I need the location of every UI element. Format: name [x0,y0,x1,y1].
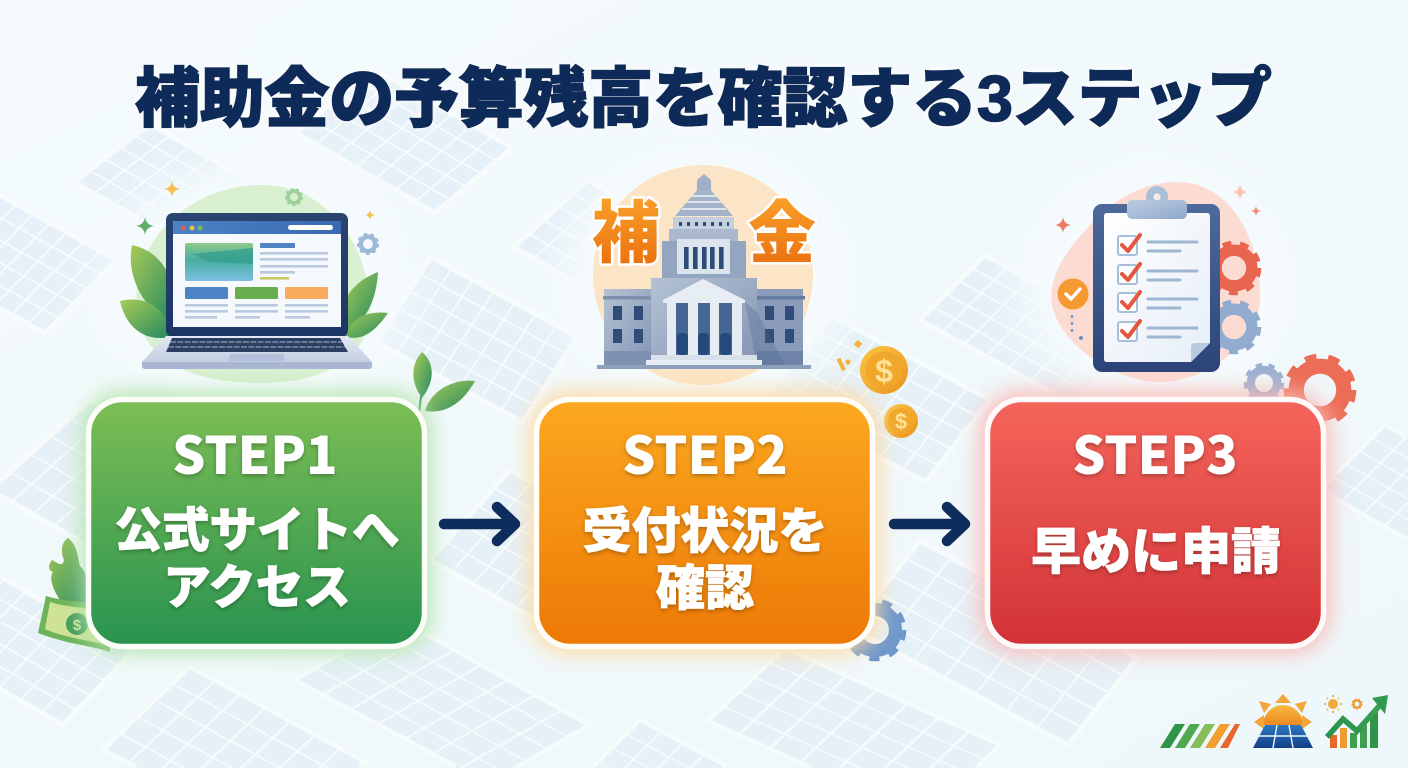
title: 補助金の予算残高を確認する3ステップ [135,62,1272,135]
logo [1160,694,1388,748]
white glow behind illustrations [105,150,1300,410]
browser bar [173,221,341,234]
leaves by step 1 card [413,352,475,414]
clipboard board [1093,204,1220,372]
banknote and leaf by step 1 [38,538,110,652]
orange check badge [1058,278,1088,340]
step 2 card [536,400,872,646]
kanji 金: 金 [748,196,816,272]
gears behind clipboard [1210,244,1258,292]
step 2 text: 受付状況を [582,505,828,559]
step 3 text: 早めに申請 [1031,524,1281,580]
step 1 card [88,400,424,646]
keyboard [166,338,348,352]
sparkles [1055,184,1261,233]
green blob [136,185,370,383]
sun and solar panel [1253,694,1313,748]
step 2 text: STEP2 [622,414,788,489]
sparkles and small gears [136,181,378,254]
step 3 illustration: clipboard [1051,182,1261,382]
touchpad [228,354,285,361]
banknote and leaf by step 1: $ [73,617,82,634]
kanji 補: 補 [592,196,660,272]
step 3 card [988,400,1324,646]
step 1 text: アクセス [163,562,351,615]
growth chart [1324,695,1388,748]
card glows [82,392,1330,653]
laptop lid [166,213,348,337]
step 1 text: STEP1 [172,414,338,489]
blue gear by step 2 [847,602,903,658]
step 2 illustration: Diet building [592,165,816,385]
arrow 2 to 3 [894,507,965,541]
arrow 1 to 2 [444,507,515,541]
step 3 text: STEP3 [1072,414,1238,489]
clip [1127,186,1187,219]
step 1 text: 公式サイトへ [114,505,400,558]
pink blob [1051,182,1260,382]
page content [185,243,253,281]
stripes [1160,724,1240,748]
checklist [1118,235,1197,341]
step 2 text: 確認 [656,562,754,616]
leaves [120,245,388,338]
coins by step 2: $ [875,353,893,389]
coins by step 2: $ [895,409,907,434]
orange circle [593,165,813,385]
step 1 illustration: laptop [120,181,388,383]
coins by step 2 [837,340,918,438]
paper [1104,213,1210,362]
red and blue gears by step 3 [1246,358,1352,422]
step 2 text [582,414,828,616]
laptop base [142,336,372,369]
step 3 text [1031,414,1281,580]
building [597,174,811,369]
step 1 text [114,414,400,615]
